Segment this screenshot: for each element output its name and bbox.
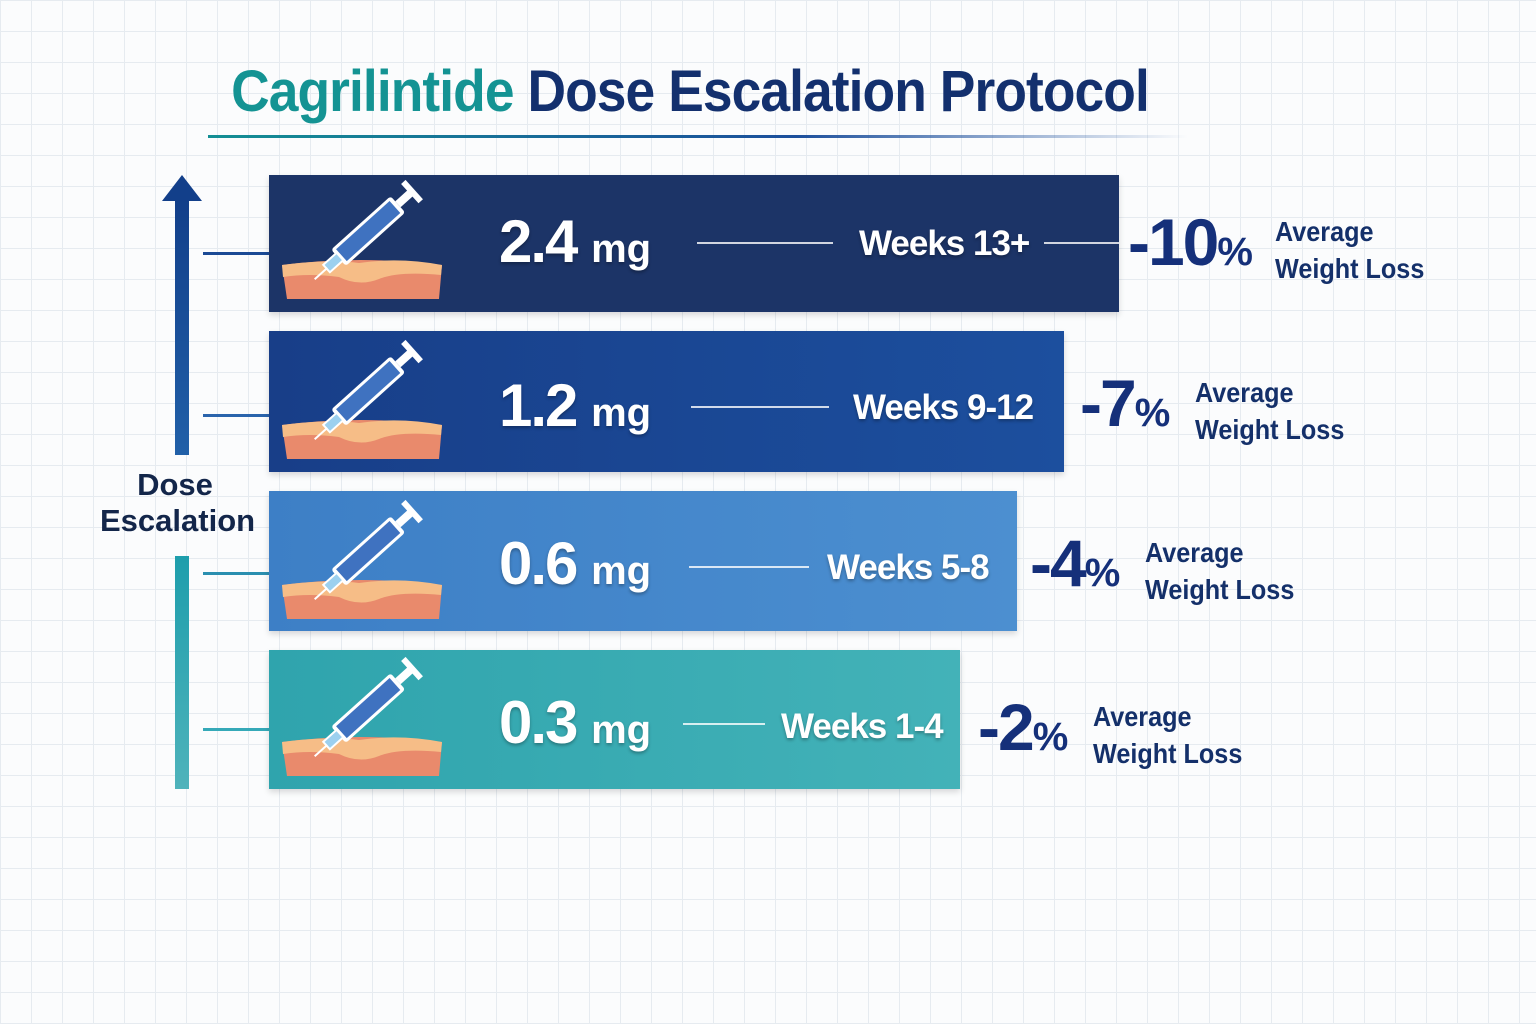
stat: -10%	[1128, 205, 1424, 284]
stat: -10%: -10%	[1128, 205, 1253, 279]
axis label	[100, 467, 255, 538]
stat: -2%: Weight Loss	[1093, 738, 1242, 769]
row: 0.3 mg: 0.3 mg	[499, 689, 651, 756]
stat: -2%: Average	[1093, 701, 1192, 732]
icon: syringe	[282, 180, 442, 299]
text: weeks: Weeks 1-4	[781, 707, 943, 746]
stat: -10%: Weight Loss	[1275, 253, 1424, 284]
stat: -4%: Weight Loss	[1145, 574, 1294, 605]
row: 1.2 mg: 1.2 mg	[499, 372, 651, 439]
text: weeks: Weeks 13+	[859, 224, 1029, 263]
icon: syringe	[282, 500, 442, 619]
stat: -7%	[1080, 366, 1344, 445]
axis label: Escalation	[100, 503, 255, 538]
axis: arrow up	[162, 175, 202, 455]
row: 0.6 mg	[269, 491, 1017, 631]
text: weeks: Weeks 9-12	[853, 388, 1033, 427]
stat: -7%: Weight Loss	[1195, 414, 1344, 445]
axis lower bar	[175, 556, 189, 789]
row: 2.4 mg	[269, 175, 1119, 312]
title: Cagrilintide Dose Escalation Protocol	[231, 59, 1149, 124]
stat: -10%: Average	[1275, 216, 1374, 247]
row: 0.3 mg	[269, 650, 960, 789]
stat: -7%: -7%	[1080, 366, 1170, 440]
stat: -4%: -4%	[1030, 526, 1120, 600]
stat: -2%: -2%	[978, 690, 1068, 764]
icon: syringe	[282, 340, 442, 459]
stat: -4%	[1030, 526, 1294, 605]
stat: -4%: Average	[1145, 537, 1244, 568]
row: 2.4 mg: 2.4 mg	[499, 208, 651, 275]
row: 0.6 mg: 0.6 mg	[499, 530, 651, 597]
icon: syringe	[282, 656, 442, 776]
stat: -7%: Average	[1195, 377, 1294, 408]
row: 1.2 mg	[269, 331, 1064, 472]
stat: -2%	[978, 690, 1242, 769]
text: weeks: Weeks 5-8	[827, 548, 989, 587]
axis label: Dose	[137, 467, 213, 502]
